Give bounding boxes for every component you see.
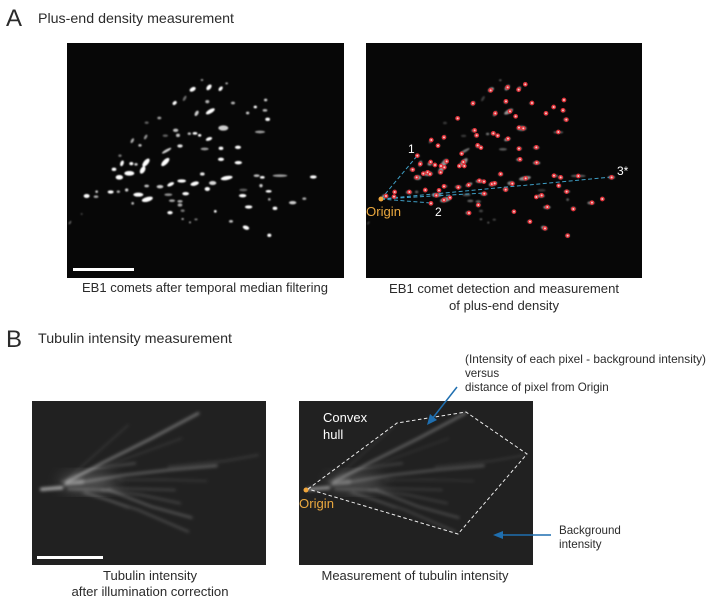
heading: plus-end density measurement: Plus-end density measurement — [38, 11, 234, 26]
convex hull outline — [308, 412, 527, 534]
label: 2: 2 — [435, 205, 442, 219]
panel: EB1 comets after filtering — [67, 43, 344, 278]
scale bar — [73, 268, 134, 271]
caption: measurement of tubulin intensity: Measurement of tubulin intensity — [322, 568, 509, 583]
label: 1: 1 — [408, 142, 415, 156]
panel letter B: B — [6, 326, 22, 353]
origin marker — [378, 196, 384, 202]
arrow: to fibre intensity — [427, 387, 457, 425]
scale bar — [37, 556, 103, 559]
heading: tubulin intensity measurement: Tubulin intensity measurement — [38, 331, 232, 346]
caption: EB1 comet detection: EB1 comet detection and measurement — [389, 281, 619, 296]
caption: tubulin intensity — [72, 568, 228, 599]
caption: tubulin intensity: after illumination correction — [72, 584, 228, 599]
origin marker — [304, 488, 308, 492]
dashed measurement lines from origin — [381, 156, 612, 203]
annotation: intensity versus distance: distance of pixel from Origin — [465, 381, 609, 394]
caption: tubulin intensity: Tubulin intensity — [103, 568, 198, 583]
label: convex hull: Convex — [323, 410, 368, 425]
caption: EB1 comet detection: of plus-end density — [449, 298, 560, 313]
annotation: background intensity: intensity — [559, 538, 602, 551]
annotation: intensity versus distance: (Intensity of each pixel - background intensity) — [465, 353, 706, 366]
caption: EB1 comets: EB1 comets after temporal median filtering — [82, 280, 328, 295]
arrow: to background — [493, 531, 551, 539]
annotation: background intensity — [559, 524, 621, 551]
caption: EB1 comet detection — [389, 281, 619, 313]
panel: EB1 comet detection — [366, 43, 642, 278]
panel: tubulin intensity — [32, 401, 266, 565]
annotation: background intensity: Background — [559, 524, 621, 537]
label: origin: Origin — [366, 204, 401, 219]
label: origin: Origin — [299, 496, 334, 511]
label: convex hull: hull — [323, 427, 343, 442]
panel letter A: A — [6, 5, 22, 32]
label: 3*: 3* — [617, 164, 629, 178]
annotation: intensity versus distance — [465, 353, 706, 394]
detected comet markers — [384, 83, 613, 237]
annotation: intensity versus distance: versus — [465, 367, 499, 380]
panel: measurement of tubulin intensity — [299, 401, 533, 565]
